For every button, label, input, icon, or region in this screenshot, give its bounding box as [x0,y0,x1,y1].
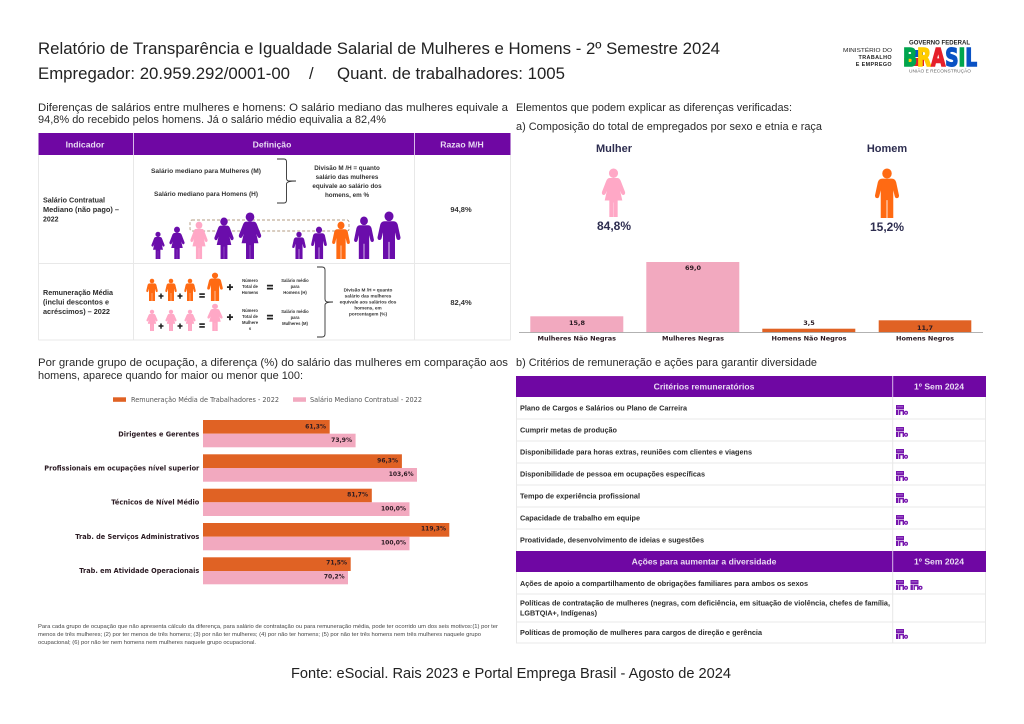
chart legend: Salário Mediano Contratual - 2022 [310,396,422,404]
panel: remuneration criteria and diversity actions table [516,376,986,643]
row 2 women formula: Total de [242,314,259,319]
row 2 women formula: Mulheres (M) [282,321,309,326]
row 2 men formula: para [291,284,300,289]
group: Profissionais: 103,6% [389,471,414,478]
row 2 men formula: Número [242,278,258,283]
row 1 division text: homens, em % [325,192,369,199]
group: Serviços Administrativos: Trab. de Serviços Administrativos [75,533,199,541]
bar chart: composition by sex and race: Homens Negros [896,334,954,342]
header: diversity actions: 1º Sem 2024 [914,556,964,566]
row 2 men formula: Homens [242,290,259,295]
diversity rows: Políticas de promoção de mulheres para cargos de direção e gerência [520,630,762,637]
row 2 brace [317,267,333,337]
panel: share of women [596,143,633,233]
row 2 men formula: Homens (H) [283,290,307,295]
criteria rows: Plano de Cargos e Salários ou Plano de Carreira [520,406,687,412]
row 1 definition labels: Salário mediano para Homens (H) [154,192,258,198]
panel: share of men: 15,2% [870,220,904,234]
text: salary difference summary: Diferenças de salários entre mulheres e homens: O salário mediano das mulheres equivale a [38,102,509,114]
row 2 ratio: 82,4% [450,298,472,307]
row 2 men formula: Total de [242,284,259,289]
source: Fonte: eSocial. Rais 2023 e Portal Emprega Brasil - Agosto de 2024 [291,666,731,682]
group: Serviços Administrativos [75,523,449,550]
row 2 division text: homens, em [354,306,382,310]
row 2 division text: equivale aos salários dos [340,300,397,304]
logo: governo federal brasil: UNIÃO E RECONSTRUÇÃO [909,68,972,74]
diversity icons [896,580,922,639]
text: occupation group intro: homens, aparece quando for maior ou menor que 100: [38,370,303,382]
row 2 women formula: + [177,321,183,331]
logo: governo federal brasil: BRASIL [903,43,977,72]
row 1 brace [277,159,296,203]
row 1 ratio: 94,8% [450,205,472,214]
panel: share of men: Homem [867,143,907,155]
row 1 indicator name: 2022 [43,216,59,224]
header: criteria [516,376,986,397]
logo: governo federal brasil: GOVERNO FEDERAL [909,40,970,46]
bar chart: composition by sex and race: Mulheres Não Negras [538,334,616,342]
bar chart: composition by sex and race: Homens Não Negros [772,334,847,342]
bar chart: composition by sex and race: 11,7 [917,324,933,332]
diversity rows: Políticas de contratação de mulheres (negras, com deficiência, em situação de violência, chefes de família, [520,600,890,608]
row 2 men formula: + [177,291,183,301]
group: Dirigentes e Gerentes: 61,3% [305,424,326,430]
employer line: / [309,65,314,83]
group: Serviços Administrativos: 100,0% [381,540,406,546]
diversity rows: Ações de apoio a compartilhamento de obrigações familiares para ambos os sexos [520,581,808,588]
panel: share of women: Mulher [596,143,633,155]
header: diversity actions [516,551,986,572]
diversity rows: LGBTQIA+, Indígenas) [520,610,597,618]
table header: Indicador [66,140,105,150]
row 2 women formula: Mulhere [242,320,259,325]
logo: ministério: E EMPREGO [856,62,892,68]
group: Dirigentes e Gerentes: Dirigentes e Gerentes [118,430,199,438]
logo: ministério [843,47,892,68]
row 2 division text: porcentagem (%) [349,312,387,316]
row 2 women formula [147,304,309,332]
group: Profissionais: 96,3% [377,458,398,464]
criteria icons [896,405,907,546]
row 2 women formula: Salário médio [281,309,309,314]
chart legend [113,396,422,404]
row 1 division text: salário das mulheres [316,174,379,181]
logo: ministério: TRABALHO [859,55,892,61]
text: salary difference summary [38,102,509,126]
group: Atividade Operacional: Trab. em Atividade Operacionais [79,567,199,575]
text: explanatory elements heading [516,102,823,133]
chart legend: Remuneração Média de Trabalhadores - 2022 [131,396,279,404]
row 1 definition labels [151,169,261,198]
bar chart: composition by sex and race: 15,8 [569,319,585,327]
employer line: Quant. de trabalhadores: 1005 [337,65,565,83]
group: Técnicos [111,489,410,516]
row 1 median dashed box [190,220,349,231]
criteria rows: Disponibilidade para horas extras, reuniões com clientes e viagens [520,450,752,456]
row 2 division text: Divisão M /H = quanto [344,288,393,292]
text: occupation group intro: Por grande grupo de ocupação, a diferença (%) do salário das mulheres em comparação aos [38,357,509,369]
row 2 men formula [146,273,309,302]
table header [38,133,510,155]
icons: men row [292,212,400,259]
bar chart: wage ratio by occupation group [44,420,449,584]
row 2 indicator name [43,290,113,316]
row 2 women formula: + [158,321,164,331]
group: Atividade Operacional: 71,5% [326,560,347,566]
table header: Definição [253,140,291,150]
row 2 division text: salário das mulheres [345,294,392,298]
text: salary difference summary: 94,8% do recebido pelos homens. Já o salário médio equivalia a 82,4% [38,114,386,126]
criteria rows: Disponibilidade de pessoa em ocupações específicas [520,472,705,478]
group: Dirigentes e Gerentes: 73,9% [331,437,352,444]
row 2 men formula: + [227,282,233,294]
text: explanatory elements heading: Elementos que podem explicar as diferenças verificadas: [516,102,792,114]
row 1 indicator name: Salário Contratual [43,198,105,204]
header: diversity actions: Ações para aumentar a diversidade [632,556,777,566]
footnote: menos de três mulheres; (2) por ter menos de três homens; (3) por não ter mulheres; (4) por não ter homens; (5) por não ter três homens nem três mulheres naquele grupo [38,632,481,638]
row 2 men formula: + [158,291,164,301]
footnote [38,624,498,646]
group: Técnicos: 81,7% [347,492,368,498]
row 2 women formula: = [199,321,205,332]
panel: share of women: 84,8% [597,219,631,233]
panel: indicator table [38,133,510,340]
row 1 indicator name [43,198,119,224]
employer line: Empregador: 20.959.292/0001-00 [38,65,290,83]
bar chart: composition by sex and race: Mulheres Negras [662,334,724,342]
group: Serviços Administrativos: 119,3% [421,526,446,532]
row 2 indicator name: Remuneração Média [43,290,113,297]
diversity rows [520,581,890,637]
panel: share of men [867,143,907,234]
group: Dirigentes e Gerentes [118,420,356,447]
text: criteria heading: b) Critérios de remuneração e ações para garantir diversidade [516,357,817,369]
criteria rows: Cumprir metas de produção [520,428,617,434]
icon: woman [602,169,625,216]
bar chart: composition by sex and race [519,262,983,342]
row 2 women formula: + [227,312,233,324]
row 1 division text: Divisão M /H = quanto [314,165,380,172]
footnote: ocupacional; (6) por não ter nem homens nem mulheres naquele grupo ocupacional. [38,640,256,646]
header: criteria: 1º Sem 2024 [914,382,964,392]
header: criteria: Critérios remuneratórios [654,382,755,392]
row 1 indicator name: Mediano (não pago) – [43,207,119,214]
bar chart: composition by sex and race: 3,5 [803,319,815,327]
row 2 indicator name: (inclui descontos e [43,300,109,306]
group: Atividade Operacional [79,557,351,584]
employer line [38,65,565,83]
text: explanatory elements heading: a) Composição do total de empregados por sexo e etnia e raça [516,121,823,133]
criteria rows: Proatividade, desenvolvimento de ideias e sugestões [520,538,704,544]
row 1 division text [312,165,382,199]
footnote: Para cada grupo de ocupação que não apresenta cálculo da diferença, para salário de contratação ou para remuneração média, pode ter ocorrido um dos seis motivos:(1) por ter [38,624,498,630]
row 2 men formula: = [199,291,205,302]
row 2 women formula: s [249,326,252,331]
criteria rows [520,406,752,544]
table header: Razao M/H [440,140,484,150]
row 2 women formula: para [291,315,300,320]
title: Relatório de Transparência e Igualdade Salarial de Mulheres e Homens - 2º Semestre 2024 [38,40,720,58]
group: Técnicos: Técnicos de Nível Médio [111,498,199,506]
row 1 definition labels: Salário mediano para Mulheres (M) [151,169,261,175]
icons: women row [152,213,261,259]
row 1 division text: equivale ao salário dos [312,183,382,190]
criteria rows: Capacidade de trabalho em equipe [520,516,640,522]
group: Técnicos: 100,0% [381,506,406,512]
row 2 men formula: = [267,282,273,294]
row 2 women formula: = [267,312,273,324]
row 2 division text [340,288,397,316]
row 2 women formula: Número [242,308,258,313]
bar chart: composition by sex and race: 69,0 [685,264,701,272]
logo: ministério: MINISTÉRIO DO [843,47,892,54]
group: Profissionais: Profissionais em ocupações nível superior [44,464,200,472]
icon: man [876,169,898,217]
group: Profissionais [44,454,417,482]
criteria rows: Tempo de experiência profissional [520,494,640,500]
group: Atividade Operacional: 70,2% [324,574,345,580]
row 2 indicator name: acréscimos) – 2022 [43,309,110,316]
text: occupation group intro [38,357,509,382]
row 2 men formula: Salário médio [281,278,309,283]
